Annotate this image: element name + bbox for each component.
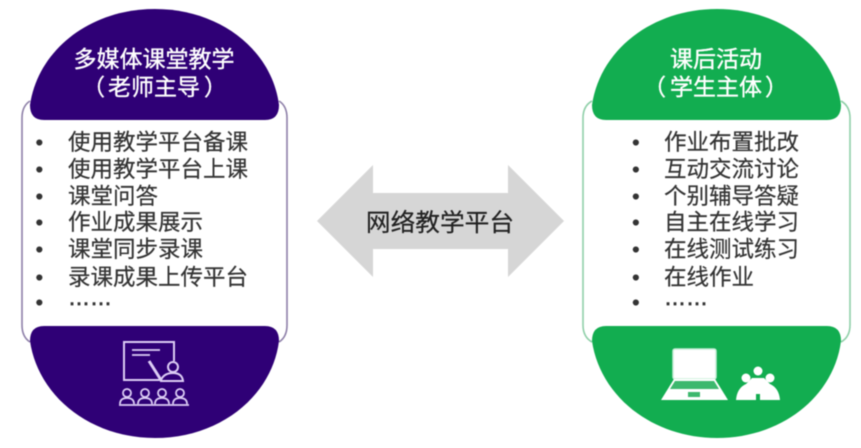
text block: classroom list items: • <box>36 130 43 155</box>
text block: after-class list items: • <box>632 290 640 315</box>
text block: classroom list items: 作业成果展示 <box>68 210 203 235</box>
text block: classroom list items: • <box>36 157 43 182</box>
text block: after-class list items: 自主在线学习 <box>664 210 799 235</box>
text block: classroom list items: 录课成果上传平台 <box>68 265 248 290</box>
text block: after-class list items: • <box>632 184 640 209</box>
text block: classroom list items <box>36 130 248 315</box>
label: online teaching platform: 网络教学平台 <box>366 209 514 237</box>
text block: after-class list items: 个别辅导答疑 <box>664 184 799 209</box>
arrow: bidirectional platform arrow <box>317 165 564 277</box>
title: classroom teaching: 多媒体课堂教学 <box>74 46 234 72</box>
text block: classroom list items: 使用教学平台上课 <box>68 157 248 182</box>
text block: after-class list items: • <box>632 237 640 262</box>
text block: classroom list items: • <box>36 265 43 290</box>
right column: after-class activities <box>583 9 850 438</box>
text block: after-class list items: • <box>632 265 640 290</box>
subtitle: teacher led: （老师主导） <box>82 74 227 100</box>
text block: after-class list items: 在线作业 <box>664 265 754 290</box>
text block: after-class list items: …… <box>664 285 708 310</box>
left column: classroom teaching <box>22 9 287 438</box>
text block: classroom list items: …… <box>68 285 112 310</box>
heading dome: after-class activities <box>592 9 841 120</box>
text block: after-class list items <box>632 130 799 315</box>
icon: group of students <box>736 366 780 400</box>
footer dome: classroom <box>30 326 279 438</box>
text block: after-class list items: • <box>632 157 640 182</box>
panel: after-class activities list <box>583 101 850 342</box>
text block: classroom list items: 使用教学平台备课 <box>68 130 248 155</box>
subtitle: student centred: （学生主体） <box>643 74 788 100</box>
text block: classroom list items: • <box>36 210 43 235</box>
text block: classroom list items: 课堂同步录课 <box>68 237 203 262</box>
text block: after-class list items: 作业布置批改 <box>664 130 799 155</box>
text block: after-class list items: 互动交流讨论 <box>664 157 799 182</box>
text block: classroom list items: • <box>36 237 43 262</box>
icon: teacher at whiteboard with students <box>119 342 189 405</box>
heading dome: classroom teaching <box>30 9 279 120</box>
text block: classroom list items: • <box>36 290 43 315</box>
panel: classroom activities list <box>22 101 287 342</box>
text block: classroom list items: • <box>36 184 43 209</box>
text block: after-class list items: 在线测试练习 <box>664 237 799 262</box>
text block: classroom list items: 课堂问答 <box>68 184 158 209</box>
text block: after-class list items: • <box>632 210 640 235</box>
text block: after-class list items: • <box>632 130 640 155</box>
icon: laptop <box>661 349 728 400</box>
footer dome: after-class <box>592 326 841 438</box>
title: after-class activities: 课后活动 <box>670 46 762 72</box>
